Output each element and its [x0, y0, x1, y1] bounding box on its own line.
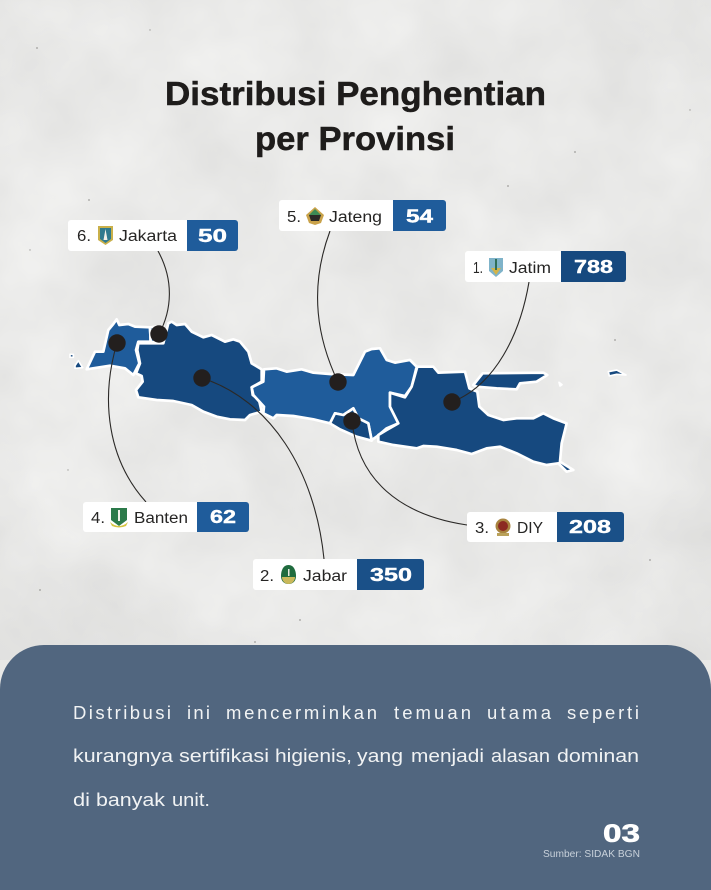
label: Banten 62: 62 — [210, 507, 236, 527]
summary text: yang — [357, 745, 403, 766]
label: Jakarta 50: Jakarta — [119, 228, 177, 245]
icon: DIY emblem — [496, 518, 510, 536]
label: Jabar 350 — [253, 559, 424, 590]
map: small western islands — [70, 354, 83, 368]
summary text — [73, 702, 639, 810]
summary text: alasan — [491, 745, 550, 766]
map: Jakarta — [150, 326, 163, 343]
label: Jabar 350: Jabar — [303, 568, 347, 585]
summary text: utama — [487, 702, 552, 723]
title — [165, 75, 546, 157]
label: Jakarta 50 — [68, 220, 238, 251]
map: Jatim — [378, 367, 573, 472]
page number: 03 — [603, 820, 640, 848]
summary text: unit. — [172, 789, 210, 810]
label: Banten 62 — [83, 502, 249, 532]
map: Jateng — [252, 348, 417, 440]
source: Sumber: SIDAK BGN — [543, 849, 640, 860]
label: Jabar 350: 2. — [260, 568, 274, 585]
label: DIY 208: DIY — [517, 520, 543, 537]
icon: Jateng emblem — [306, 207, 324, 225]
label: Jatim 788: Jatim — [509, 260, 551, 277]
label: Jateng 54: 5. — [287, 209, 301, 226]
label: Jakarta 50: 6. — [77, 228, 91, 245]
label: Jateng 54: Jateng — [329, 209, 382, 226]
summary text: ini — [187, 702, 210, 723]
map: Banten — [87, 319, 151, 375]
icon: Jakarta emblem — [98, 226, 113, 245]
summary text: kurangnya — [73, 745, 174, 766]
label: DIY 208: 208 — [569, 517, 611, 537]
title: per Provinsi — [255, 120, 455, 157]
title: Distribusi Penghentian — [165, 75, 546, 112]
label: DIY 208: 3. — [475, 520, 489, 537]
label: Banten 62: 4. — [91, 510, 105, 527]
location dots — [108, 325, 461, 430]
map of Java — [70, 231, 626, 559]
map: Madura — [473, 373, 547, 389]
map: small eastern islands — [559, 370, 626, 386]
icon: Jabar emblem — [281, 565, 296, 584]
label: Jatim 788: 788 — [574, 257, 613, 277]
summary text: dominan — [557, 745, 639, 766]
label: Banten 62: Banten — [134, 510, 188, 527]
summary text: seperti — [567, 702, 639, 723]
summary text: di — [73, 789, 90, 810]
label: Jateng 54 — [279, 200, 446, 231]
icon: Banten emblem — [110, 508, 128, 528]
label: Jatim 788 — [465, 251, 626, 282]
summary text: sertifikasi — [179, 745, 269, 766]
label: DIY 208 — [467, 512, 624, 542]
summary text: Distribusi — [73, 702, 171, 723]
summary text: higienis, — [275, 745, 352, 766]
summary text: mencerminkan — [226, 702, 377, 723]
map: DIY — [330, 408, 372, 441]
summary text: temuan — [394, 702, 471, 723]
panel: summary — [0, 645, 711, 890]
label: Jatim 788: 1. — [473, 260, 483, 277]
label: Jabar 350: 350 — [370, 565, 412, 585]
connector lines — [109, 231, 529, 559]
icon: Jatim emblem — [489, 258, 503, 277]
label: Jakarta 50: 50 — [198, 226, 227, 246]
label: Jateng 54: 54 — [406, 206, 433, 226]
summary text: menjadi — [411, 745, 484, 766]
map: Jabar — [136, 322, 262, 420]
summary text: banyak — [96, 789, 166, 810]
